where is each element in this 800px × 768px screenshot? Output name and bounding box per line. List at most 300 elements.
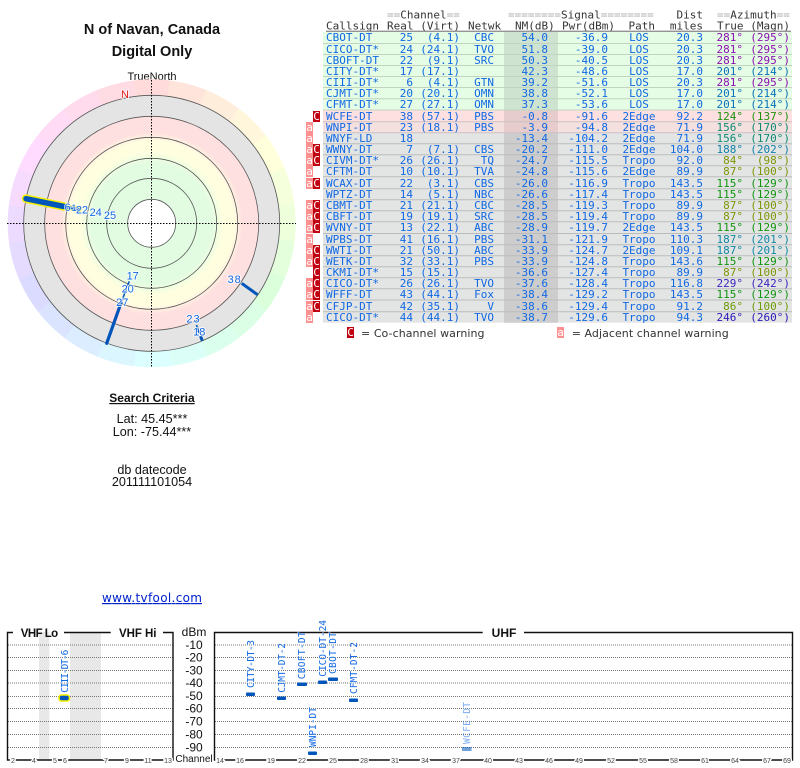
row: WNYF-LD: 71.9 — [676, 132, 703, 145]
row: WNPI-DT: 71.9 — [676, 121, 703, 134]
channel ticks: 11 — [144, 758, 152, 765]
row: CFMT-DT*: 37.3 — [522, 98, 548, 111]
row: CJMT-DT*: LOS — [629, 87, 649, 100]
row: CBFT-DT: (100°) — [750, 210, 790, 223]
row: CICO-DT* 26: 26 — [400, 277, 413, 290]
row: CBFT-DT: 89.9 — [676, 210, 703, 223]
row: WNYF-LD: a — [306, 132, 313, 145]
row: WETK-DT: -33.9 — [515, 255, 548, 268]
station table header: Signal — [561, 8, 601, 22]
row: CBOFT-DT: 281° — [716, 54, 743, 67]
unavailable channel bands — [39, 632, 101, 760]
row: WWNY-DT — [306, 143, 790, 156]
row: CBOT-DT: 54.0 — [522, 31, 548, 44]
row: CFMT-DT*: (27.1) — [420, 98, 460, 111]
row: CBOFT-DT: 22 — [400, 54, 413, 67]
row: WCAX-DT: CBS — [474, 177, 494, 190]
row: WVNY-DT: (129°) — [750, 221, 790, 234]
channel ticks: 58 — [670, 758, 678, 765]
row: CICO-DT* 26 — [306, 277, 790, 290]
row: CITY-DT*: (17.1) — [420, 65, 460, 78]
row: CICO-DT* 44: 44 — [400, 311, 413, 324]
row: CICO-DT* 24: CICO-DT* — [326, 43, 379, 56]
row: WFFF-DT: (44.1) — [420, 288, 460, 301]
row: WFFF-DT: a — [306, 288, 313, 301]
station table header: Path — [628, 20, 655, 32]
row: CBMT-DT: 21 — [400, 199, 413, 212]
row: WCAX-DT: C — [313, 177, 320, 190]
row: CBFT-DT: Tropo — [622, 210, 656, 223]
channel labels on polar chart: 6 — [64, 202, 71, 214]
row: CKMI-DT*: (100°) — [750, 266, 790, 279]
row: CICO-DT* 26: (26.1) — [420, 277, 460, 290]
row: CIVM-DT*: 26 — [400, 154, 413, 167]
row: CBFT-DT: -28.5 — [515, 210, 548, 223]
station table header: miles — [670, 20, 703, 32]
channel ticks: 61 — [701, 758, 709, 765]
polar azimuth chart — [7, 72, 296, 368]
row: WNPI-DT: a — [306, 121, 313, 134]
row: WWNY-DT: CBS — [474, 143, 494, 156]
channel ticks: 25 — [329, 758, 337, 765]
legend: adjacent channel warning: = Adjacent channel warning — [572, 327, 729, 340]
north marker: N — [121, 89, 129, 101]
row: WWTI-DT: -124.7 — [568, 244, 608, 257]
row: CFTM-DT: -24.8 — [515, 165, 548, 178]
row: WCFE-DT: (57.1) — [420, 110, 460, 123]
search criteria: Search Criteria — [109, 391, 195, 405]
marker: CFMT-DT-2: CFMT-DT-2 — [349, 642, 360, 694]
row: WNPI-DT: -3.9 — [522, 121, 548, 134]
channel ticks — [216, 758, 791, 765]
row: WWNY-DT: (7.1) — [427, 143, 460, 156]
grid lines — [215, 645, 792, 748]
channel labels on polar chart: 18 — [193, 326, 205, 338]
dBm scale: -10 — [185, 638, 203, 652]
dBm scale: -20 — [185, 650, 203, 664]
VHF Hi heading: VHF Hi — [119, 628, 156, 640]
row: WCFE-DT: 38 — [400, 110, 413, 123]
title: N of Navan, Canada — [84, 22, 221, 38]
frame — [214, 632, 792, 760]
channel labels on polar chart: 17 — [127, 270, 139, 282]
station table header: True — [717, 20, 744, 32]
row: WWNY-DT: 104.0 — [670, 143, 703, 156]
row: CFJP-DT: C — [313, 300, 320, 313]
row: CBFT-DT — [306, 210, 790, 223]
row: CKMI-DT*: 87° — [723, 266, 743, 279]
row: CJMT-DT*: -52.1 — [575, 87, 608, 100]
row: WPTZ-DT: -26.6 — [515, 188, 548, 201]
station table header: (Virt) — [420, 20, 460, 32]
row: WFFF-DT: Tropo — [622, 288, 656, 301]
row: WCFE-DT: -91.6 — [575, 110, 608, 123]
row: CBMT-DT: C — [313, 199, 320, 212]
row: WWNY-DT: C — [313, 143, 320, 156]
row: CKMI-DT*: C — [313, 266, 320, 279]
channel ticks: 31 — [391, 758, 399, 765]
row: CBOFT-DT: -40.5 — [575, 54, 608, 67]
row: CFJP-DT: -129.4 — [568, 300, 608, 313]
row: WWNY-DT: 188° — [716, 143, 743, 156]
row: CBMT-DT: a — [306, 199, 313, 212]
title: Digital Only — [112, 44, 192, 60]
row: CKMI-DT*: -127.4 — [568, 266, 608, 279]
row: WFFF-DT: C — [313, 288, 320, 301]
row: WPTZ-DT: 115° — [716, 188, 743, 201]
dBm scale: -70 — [185, 714, 203, 728]
channel labels on polar chart: 25 — [104, 210, 116, 222]
row: CICO-DT* 26: a — [306, 277, 313, 290]
row: CFTM-DT: -115.6 — [568, 165, 608, 178]
row: WVNY-DT: a — [306, 221, 313, 234]
row: WNPI-DT: 2Edge — [622, 121, 656, 134]
row: WPBS-DT: a — [306, 233, 313, 246]
row: CIII-DT*: 39.2 — [522, 76, 548, 89]
channel ticks: 14 — [216, 758, 224, 765]
row: CICO-DT* 26: -128.4 — [568, 277, 608, 290]
row: WETK-DT — [306, 255, 790, 268]
database datecode: 201111101054 — [112, 475, 192, 489]
row: CIII-DT*: (295°) — [750, 76, 790, 89]
row: WETK-DT: -124.8 — [568, 255, 608, 268]
row: CFJP-DT: 91.2 — [676, 300, 703, 313]
channel ticks — [11, 758, 172, 765]
row: CBOT-DT: CBC — [474, 31, 494, 44]
row: WFFF-DT: -38.4 — [515, 288, 548, 301]
station table header: == — [777, 8, 790, 22]
row: CIVM-DT*: 92.0 — [676, 154, 703, 167]
row: WPBS-DT: Tropo — [622, 233, 656, 246]
dBm scale: -80 — [185, 728, 203, 742]
row: WPBS-DT: (201°) — [750, 233, 790, 246]
row: CFTM-DT: TVA — [474, 165, 494, 178]
row: CFJP-DT: Tropo — [622, 300, 656, 313]
row: WCFE-DT: C — [313, 110, 320, 123]
row: CBFT-DT: 87° — [723, 210, 743, 223]
row: WVNY-DT: 115° — [716, 221, 743, 234]
row: WPBS-DT: 187° — [716, 233, 743, 246]
row: CFTM-DT: 10 — [400, 165, 413, 178]
row: WFFF-DT — [306, 288, 790, 301]
row: CITY-DT*: 42.3 — [522, 65, 548, 78]
row: WFFF-DT: 43 — [400, 288, 413, 301]
channel ticks: 7 — [104, 758, 108, 765]
row: CICO-DT* 26: Tropo — [622, 277, 656, 290]
row: CIII-DT*: -51.6 — [575, 76, 608, 89]
row: CJMT-DT*: (20.1) — [420, 87, 460, 100]
row: WVNY-DT: 13 — [400, 221, 413, 234]
row: CICO-DT* 24: 51.8 — [522, 43, 548, 56]
row: WETK-DT: (129°) — [750, 255, 790, 268]
channel labels on polar chart — [64, 202, 242, 338]
bearing bar: 201 degrees — [107, 282, 129, 343]
UHF heading: UHF — [492, 626, 516, 640]
row: CBFT-DT: -119.4 — [568, 210, 608, 223]
table row shading — [323, 32, 792, 323]
row: CBMT-DT: 87° — [723, 199, 743, 212]
row: WNPI-DT: WNPI-DT — [326, 121, 373, 134]
marker: WCFE-DT: WCFE-DT — [462, 702, 473, 744]
crosshair axes — [7, 80, 296, 367]
row: WWTI-DT: (50.1) — [420, 244, 460, 257]
channel ticks: 2 — [11, 758, 15, 765]
row: CFJP-DT: (100°) — [750, 300, 790, 313]
bearing bar: 124 degrees — [242, 283, 258, 295]
website link: www.tvfool.com — [102, 591, 202, 605]
row: CICO-DT* 24: (295°) — [750, 43, 790, 56]
row: CFJP-DT: a — [306, 300, 313, 313]
search criteria — [109, 391, 195, 439]
row: WVNY-DT: C — [313, 221, 320, 234]
row: WWNY-DT: a — [306, 143, 313, 156]
row: CFMT-DT* — [326, 98, 790, 111]
row: WWTI-DT: 2Edge — [622, 244, 656, 257]
row: WWTI-DT: 21 — [400, 244, 413, 257]
row: CIII-DT*: GTN — [474, 76, 494, 89]
row: WCAX-DT — [306, 177, 790, 190]
row: WPTZ-DT: -117.4 — [568, 188, 608, 201]
row: WPBS-DT: 110.3 — [670, 233, 703, 246]
channel ticks: 52 — [607, 758, 615, 765]
row: CICO-DT* 26: -37.6 — [515, 277, 548, 290]
UHF spectrum chart — [214, 620, 792, 765]
row: WWTI-DT: -33.9 — [515, 244, 548, 257]
row: CITY-DT*: -48.6 — [575, 65, 608, 78]
channel ticks: 6 — [63, 758, 67, 765]
channel labels on polar chart: 22 — [76, 204, 88, 216]
marker: CICO-DT-24: CICO-DT-24 — [318, 620, 329, 677]
row: CIVM-DT*: -24.7 — [515, 154, 548, 167]
channel ticks: 49 — [575, 758, 583, 765]
row: CFTM-DT: 87° — [723, 165, 743, 178]
row: CBOT-DT: (4.1) — [427, 31, 460, 44]
channel labels on polar chart: 27 — [116, 297, 128, 309]
row: WFFF-DT: (129°) — [750, 288, 790, 301]
row: CICO-DT* 44: a — [306, 311, 313, 324]
row: CICO-DT* 44: (260°) — [750, 311, 790, 324]
row: CITY-DT* — [326, 65, 790, 78]
marker: CITY-DT-3: CITY-DT-3 — [246, 640, 257, 688]
row: CIVM-DT*: TQ — [481, 154, 494, 167]
row: WCFE-DT: 124° — [716, 110, 743, 123]
row: CBOT-DT: 25 — [400, 31, 413, 44]
row: CBFT-DT: SRC — [474, 210, 494, 223]
row: WWNY-DT: -111.0 — [568, 143, 608, 156]
row: WCFE-DT: 2Edge — [622, 110, 656, 123]
row: CBOFT-DT: 50.3 — [522, 54, 548, 67]
row: CFTM-DT: a — [306, 165, 313, 178]
dBm scale: -30 — [185, 664, 203, 678]
row: WPTZ-DT: 143.5 — [670, 188, 703, 201]
row: CBMT-DT: CBMT-DT — [326, 199, 373, 212]
row: WETK-DT: a — [306, 255, 313, 268]
row: WNYF-LD: WNYF-LD — [326, 132, 372, 145]
row: CICO-DT* 44: 246° — [716, 311, 743, 324]
station table — [306, 31, 792, 324]
row: CJMT-DT*: (214°) — [750, 87, 790, 100]
row: WNPI-DT: -94.8 — [575, 121, 608, 134]
dBm scale: -60 — [185, 702, 203, 716]
row: CIII-DT*: (4.1) — [427, 76, 460, 89]
station table header: Channel — [400, 8, 447, 22]
row: CFJP-DT: (35.1) — [420, 300, 460, 313]
row: CFTM-DT: CFTM-DT — [326, 165, 373, 178]
VHF spectrum chart — [8, 628, 173, 765]
row: CBFT-DT: (19.1) — [420, 210, 460, 223]
row: CBMT-DT: -119.3 — [568, 199, 608, 212]
row: CICO-DT* 24: 24 — [400, 43, 413, 56]
row: CFTM-DT: (10.1) — [420, 165, 460, 178]
row: CITY-DT*: (214°) — [750, 65, 790, 78]
channel ticks: 67 — [763, 758, 771, 765]
channel ticks: 28 — [360, 758, 368, 765]
row: WWNY-DT: 2Edge — [622, 143, 656, 156]
row: CIII-DT*: 20.3 — [676, 76, 703, 89]
row: CITY-DT*: 201° — [716, 65, 743, 78]
channel ticks: 16 — [236, 758, 244, 765]
channel ticks: 5 — [53, 758, 57, 765]
row: WFFF-DT: Fox — [474, 288, 494, 301]
row: CJMT-DT*: 38.8 — [522, 87, 548, 100]
row: CJMT-DT*: 17.0 — [676, 87, 703, 100]
row: WFFF-DT: -129.2 — [568, 288, 608, 301]
row: CBMT-DT: (100°) — [750, 199, 790, 212]
legend: co-channel warning: = Co-channel warning — [361, 327, 484, 340]
row: WNPI-DT: 156° — [716, 121, 743, 134]
channel ticks: 43 — [515, 758, 523, 765]
row: WNYF-LD: 156° — [716, 132, 743, 145]
row: CBOFT-DT: (295°) — [750, 54, 790, 67]
channel labels on polar chart: 23 — [186, 314, 201, 326]
row: CIVM-DT*: Tropo — [622, 154, 656, 167]
row: CICO-DT* 26: TVO — [474, 277, 494, 290]
row: CBMT-DT: 89.9 — [676, 199, 703, 212]
row: WETK-DT: Tropo — [622, 255, 656, 268]
row: WWTI-DT: (201°) — [750, 244, 790, 257]
row: CBOT-DT: CBOT-DT — [326, 31, 373, 44]
row: CFJP-DT — [306, 300, 790, 313]
row: WETK-DT: (33.1) — [420, 255, 460, 268]
row: CITY-DT*: 17 — [400, 65, 413, 78]
row: CICO-DT* 44: 94.3 — [676, 311, 703, 324]
row: CBOT-DT: (295°) — [750, 31, 790, 44]
row: CBMT-DT: -28.5 — [515, 199, 548, 212]
row: WWTI-DT: 109.1 — [670, 244, 703, 257]
row: WWTI-DT — [306, 244, 790, 257]
row: WPBS-DT: -121.9 — [568, 233, 608, 246]
row: WCFE-DT: 92.2 — [676, 110, 703, 123]
station table header: Pwr(dBm) — [562, 20, 615, 32]
row: CBOT-DT: -36.9 — [575, 31, 608, 44]
row: WNYF-LD: -104.2 — [568, 132, 608, 145]
row: WWNY-DT: 7 — [406, 143, 413, 156]
search criteria: Lat: 45.45*** — [117, 412, 187, 426]
row: CITY-DT*: CITY-DT* — [326, 65, 379, 78]
row: WPTZ-DT: Tropo — [622, 188, 656, 201]
row: CIII-DT*: 281° — [716, 76, 743, 89]
marker: CJMT-DT-2: CJMT-DT-2 — [277, 643, 288, 693]
channel labels on polar chart: 1 — [71, 203, 77, 213]
channel ticks: 4 — [32, 758, 36, 765]
row: WCAX-DT: (3.1) — [427, 177, 460, 190]
channel ticks: 69 — [783, 758, 791, 765]
row: CICO-DT* 26: C — [313, 277, 320, 290]
row: WFFF-DT: 115° — [716, 288, 743, 301]
row: CICO-DT* 26: (242°) — [750, 277, 790, 290]
station table header: NM(dB) — [515, 20, 555, 32]
row: CFTM-DT — [306, 165, 790, 178]
dBm scale: dBm — [182, 625, 206, 639]
row: WPBS-DT: 41 — [400, 233, 413, 246]
row: CBFT-DT: 19 — [400, 210, 413, 223]
channel ticks: 19 — [267, 758, 275, 765]
signal quality rings — [24, 95, 280, 351]
row: CFMT-DT*: OMN — [474, 98, 494, 111]
row: CITY-DT*: 17.0 — [676, 65, 703, 78]
row: CICO-DT* 44: -38.7 — [515, 311, 548, 324]
marker: CBOT-DT: CBOT-DT — [328, 632, 339, 674]
row: WCAX-DT: (129°) — [750, 177, 790, 190]
row: WETK-DT: PBS — [474, 255, 494, 268]
row: WCFE-DT: WCFE-DT — [326, 110, 373, 123]
row: CICO-DT* 24 — [326, 43, 790, 56]
row: WPTZ-DT: NBC — [474, 188, 494, 201]
row: CICO-DT* 44: Tropo — [622, 311, 656, 324]
row: CJMT-DT*: CJMT-DT* — [326, 87, 379, 100]
row: CFMT-DT*: -53.6 — [575, 98, 608, 111]
marker: CIII-DT-6: CIII-DT-6 — [60, 649, 71, 693]
row: WCFE-DT: PBS — [474, 110, 494, 123]
row: CKMI-DT*: Tropo — [622, 266, 656, 279]
row: CICO-DT* 24: -39.0 — [575, 43, 608, 56]
row: WNPI-DT — [306, 121, 790, 134]
row: WFFF-DT: WFFF-DT — [326, 288, 373, 301]
station table header: Dist — [676, 8, 703, 22]
row: CFJP-DT: -38.6 — [515, 300, 548, 313]
row: WCAX-DT: 143.5 — [670, 177, 703, 190]
row: WCFE-DT: -0.8 — [522, 110, 548, 123]
row: CICO-DT* 24: TVO — [474, 43, 494, 56]
row: WWTI-DT: ABC — [474, 244, 494, 257]
row: WWTI-DT: WWTI-DT — [326, 244, 373, 257]
row: CITY-DT*: LOS — [629, 65, 649, 78]
row: WVNY-DT: 143.5 — [670, 221, 703, 234]
row: CJMT-DT*: 201° — [716, 87, 743, 100]
row: CKMI-DT*: CKMI-DT* — [326, 266, 379, 279]
frame — [8, 632, 173, 760]
row: CFJP-DT: CFJP-DT — [326, 300, 373, 313]
row: CKMI-DT*: (15.1) — [420, 266, 460, 279]
row: CBOFT-DT — [326, 54, 790, 67]
compass label: TrueNorth: TrueNorth — [127, 71, 177, 83]
channel ticks: 9 — [125, 758, 129, 765]
row: WCAX-DT: -116.9 — [568, 177, 608, 190]
row: CIII-DT* — [326, 76, 790, 89]
row: CBOFT-DT: CBOFT-DT — [326, 54, 379, 67]
row: WPBS-DT — [306, 233, 790, 246]
row: CIII-DT*: 6 — [406, 76, 413, 89]
row: WNYF-LD: (170°) — [750, 132, 790, 145]
row: CBMT-DT: CBC — [474, 199, 494, 212]
station table header: == — [447, 8, 460, 22]
station table header: Callsign — [326, 20, 379, 32]
row: CIVM-DT*: CIVM-DT* — [326, 154, 379, 167]
row: WPBS-DT: -31.1 — [515, 233, 548, 246]
row: CIII-DT*: LOS — [629, 76, 649, 89]
row: WCFE-DT — [313, 110, 790, 123]
row: WPBS-DT: PBS — [474, 233, 494, 246]
